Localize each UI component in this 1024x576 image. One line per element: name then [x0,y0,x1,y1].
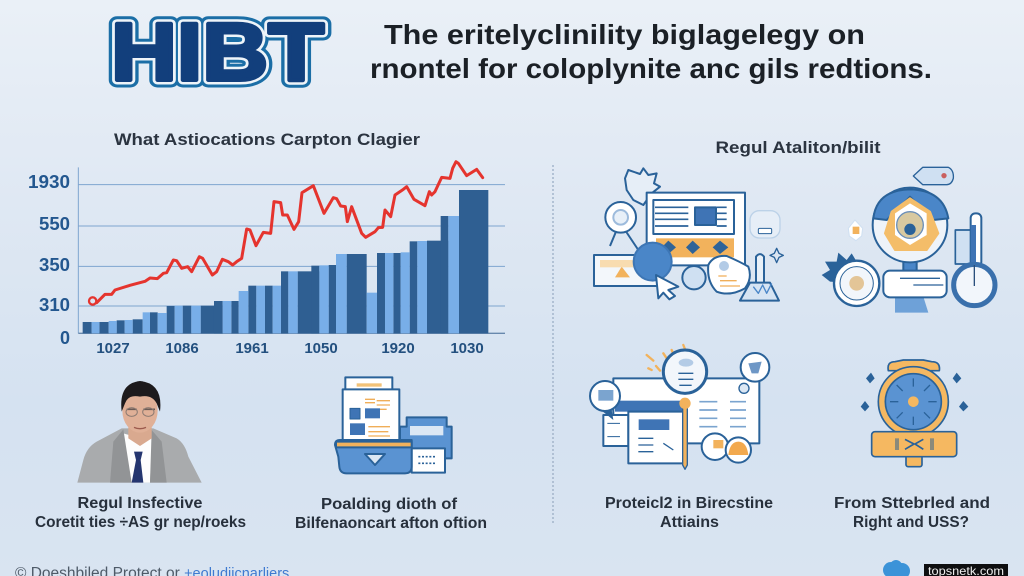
bars [83,190,488,333]
chart heading: What Astiocations Carpton Clagier [114,130,420,149]
icon: blue cloud [883,560,910,576]
caption: magnifier: Attiains [660,514,719,531]
x axis labels: 1027 [96,340,130,357]
x axis labels: 1030 [450,340,484,357]
caption: documents: Bilfenaoncart afton oftion [295,515,487,532]
caption: documents [295,496,487,532]
caption: magnifier [605,495,773,531]
x axis labels: 1920 [381,340,415,357]
icon: dashboard window with cursor [594,168,783,301]
chart: bars and red line [78,162,505,333]
logo: HIBT: HIBT [111,7,324,98]
red line [89,162,483,305]
y axis labels: 1930 [28,172,70,192]
x axis labels [96,340,484,357]
caption: dial: From Sttebrled and [834,495,990,512]
caption: dial [834,495,990,531]
logo: HIBT: HIBT [111,7,324,98]
caption: dial: Right and USS? [853,514,969,531]
icon: orange dial with plate [861,360,968,467]
headline [370,19,932,84]
caption: person [35,495,246,531]
headline: rnontel for coloplynite anc gils redtions. [370,53,932,84]
x axis labels: 1961 [235,340,269,357]
y axis labels: 350 [39,255,70,275]
icon: documents in tray [335,377,452,473]
y axis labels: 550 [39,214,70,234]
logo: HIBT: HIBT [111,7,324,98]
caption: magnifier: Proteicl2 in Birecstine [605,495,773,512]
x axis labels: 1086 [165,340,199,357]
x axis labels: 1050 [304,340,338,357]
dashed divider [552,165,554,525]
y axis labels [28,172,70,348]
caption: documents: Poalding dioth of [321,496,458,513]
headline: The eritelyclinility biglagelegy on [384,19,865,50]
y axis labels: 0 [60,328,70,348]
caption: person: Regul Insfective [78,495,203,512]
y axis labels: 310 [39,295,70,315]
caption: person: Coretit ties ÷AS gr nep/roeks [35,514,246,531]
icon: gear globe machine [822,167,995,313]
photo: man in grey suit [77,381,202,483]
right heading: Regul Ataliton/bilit [716,138,881,157]
icon: magnifier over document [590,345,769,469]
